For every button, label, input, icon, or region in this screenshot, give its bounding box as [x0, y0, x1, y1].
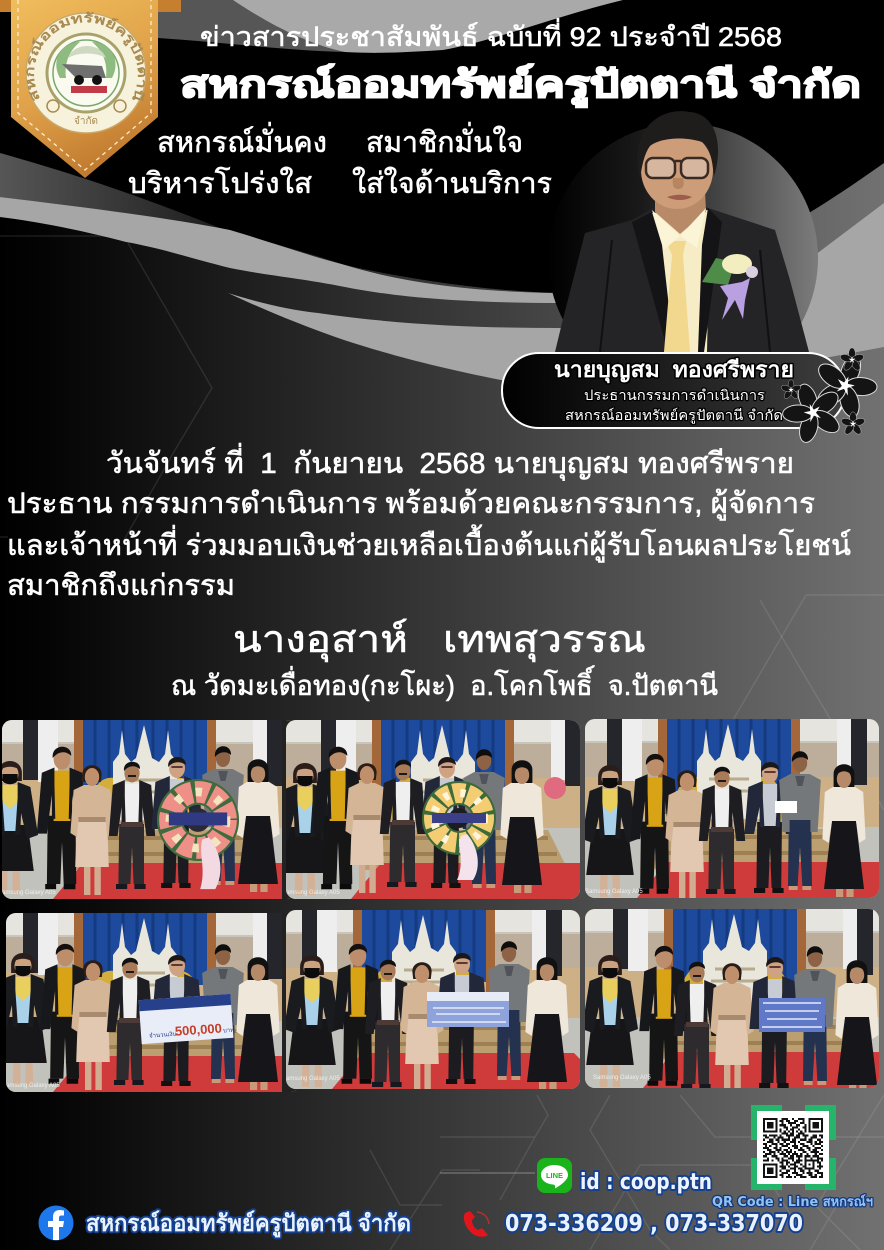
ribbon badge with seal [0, 0, 181, 178]
photo 5: cheque board [286, 910, 580, 1089]
thick horizontal background line [440, 1172, 535, 1174]
glasses [646, 158, 708, 178]
top swoosh dark [158, 0, 345, 52]
icon: phone [464, 1211, 489, 1237]
deceased name: นางอุสาห์ เทพสุวรรณ [233, 618, 646, 662]
announcement paragraph: สมาชิกถึงแก่กรรม [7, 570, 235, 602]
photo 4: cheque board 500,000: 500,000 [174, 1021, 222, 1039]
venue: ณ วัดมะเดื่อทอง(กะโผะ) อ.โคกโพธิ์ จ.ปัตตานี [171, 665, 718, 701]
photo 1: wreath presentation: amsung Galaxy A05 [2, 890, 56, 896]
seal: จำกัด [74, 116, 98, 127]
corsage [702, 254, 758, 320]
photo 6: cheque board: Samsung Galaxy A05 [593, 1075, 651, 1081]
chairman name: นายบุญสม ทองศรีพราย [554, 357, 794, 384]
photo 3: envelope handover [585, 719, 879, 898]
LINE id: id : coop.ptn [580, 1170, 712, 1195]
announcement paragraph: ประธาน กรรมการดำเนินการ พร้อมด้วยคณะกรรมการ, ผู้จัดการ [7, 488, 815, 521]
photo 4: cheque board 500,000: จำนวนเงิน [149, 1031, 177, 1040]
icon: LINE: LINE [546, 1171, 563, 1180]
shirt [652, 210, 710, 352]
neck [655, 190, 706, 234]
slogan 2: สมาชิกมั่นใจ [366, 122, 523, 159]
tie [664, 241, 690, 352]
icon: LINE [537, 1158, 572, 1193]
mouth [667, 195, 692, 200]
QR caption: QR Code : Line สหกรณ์ฯ [712, 1194, 873, 1210]
black header shape [0, 0, 884, 294]
chairman organisation: สหกรณ์ออมทรัพย์ครูปัตตานี จำกัด [565, 407, 783, 424]
announcement paragraph [7, 443, 851, 602]
chairman title: ประธานกรรมการดำเนินการ [584, 387, 765, 403]
grey wedge swoosh [0, 153, 225, 230]
collar [652, 208, 706, 250]
photo 2: wreath presentation: amsung Galaxy A05 [286, 890, 340, 896]
face [641, 131, 713, 209]
slogan 1: สหกรณ์มั่นคง [157, 122, 327, 159]
light swoosh lower [228, 203, 884, 390]
newsletter issue line: ข่าวสารประชาสัมพันธ์ ฉบับที่ 92 ประจำปี 2568 [200, 18, 782, 52]
top swoosh light [233, 0, 623, 53]
photo 4: cheque board 500,000: amsung Galaxy A05 [6, 1083, 60, 1089]
photo 6: cheque board [585, 909, 879, 1088]
photo 3: envelope handover: Samsung Galaxy A05 [585, 889, 643, 895]
name plate [502, 353, 845, 428]
icon: facebook [38, 1206, 74, 1240]
nose [673, 178, 684, 189]
announcement paragraph: และเจ้าหน้าที่ ร่วมมอบเงินช่วยเหลือเบื้องต้นแก่ผู้รับโอนผลประโยชน์ [7, 524, 851, 563]
hair [637, 111, 718, 178]
seal: สหกรณ์ออมทรัพย์ครูปัตตานี [26, 12, 146, 102]
frangipani flowers [773, 345, 884, 452]
portrait of chairman [555, 111, 809, 352]
suit [555, 207, 809, 352]
slogan 4: ใส่ใจด้านบริการ [352, 166, 552, 200]
portrait circle [548, 123, 818, 393]
phone numbers: 073-336209 , 073-337070 [505, 1211, 803, 1237]
announcement paragraph: วันจันทร์ ที่ 1 กันยายน 2568 นายบุญสม ทองศรีพราย [106, 443, 794, 481]
facebook page name: สหกรณ์ออมทรัพย์ครูปัตตานี จำกัด [86, 1210, 411, 1238]
photo 4: cheque board 500,000 [6, 913, 298, 1092]
organisation title: สหกรณ์ออมทรัพย์ครูปัตตานี จำกัด [180, 64, 861, 108]
photo 2: wreath presentation [286, 720, 580, 899]
QR code with green frame [751, 1105, 836, 1190]
slogan 3: บริหารโปร่งใส [128, 166, 312, 200]
photo 5: cheque board: amsung Galaxy A05 [286, 1076, 340, 1082]
light swoosh upper [0, 197, 560, 303]
photo 4: cheque board 500,000: บาท [223, 1028, 234, 1034]
photo 1: wreath presentation [2, 720, 291, 899]
